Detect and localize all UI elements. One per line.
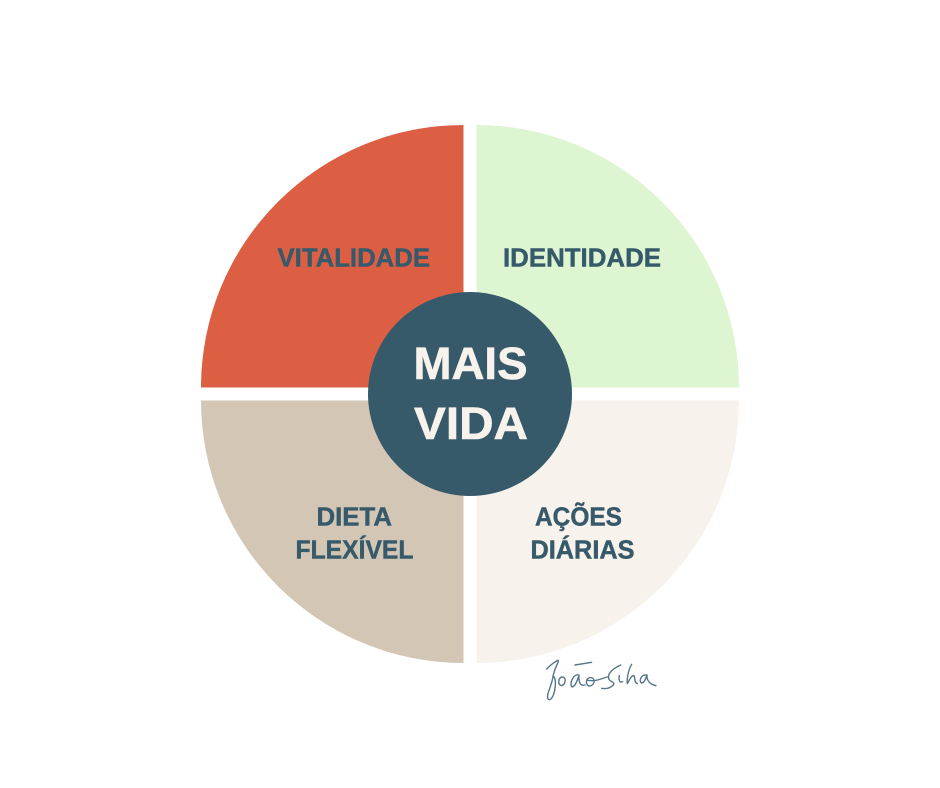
label: acoes diarias: [530, 502, 634, 564]
center title: MAIS: [414, 338, 528, 389]
center title: [414, 338, 528, 449]
label: identidade: IDENTIDADE: [503, 244, 661, 272]
label: dieta flexivel: [296, 504, 414, 564]
panel: vitalidade quadrant: [201, 125, 464, 388]
panel: identidade quadrant: [476, 125, 739, 388]
panel: acoes diarias quadrant: [476, 400, 739, 663]
label: acoes diarias: DIÁRIAS: [530, 536, 634, 564]
label: dieta flexivel: DIETA: [316, 504, 392, 532]
signature: [547, 660, 656, 700]
center title: VIDA: [414, 398, 528, 449]
center circle: mais vida: [368, 292, 572, 496]
label: vitalidade: VITALIDADE: [278, 244, 430, 272]
panel: dieta flexivel quadrant: [201, 400, 464, 663]
label: acoes diarias: AÇÕES: [535, 502, 622, 532]
label: dieta flexivel: FLEXÍVEL: [296, 536, 414, 564]
